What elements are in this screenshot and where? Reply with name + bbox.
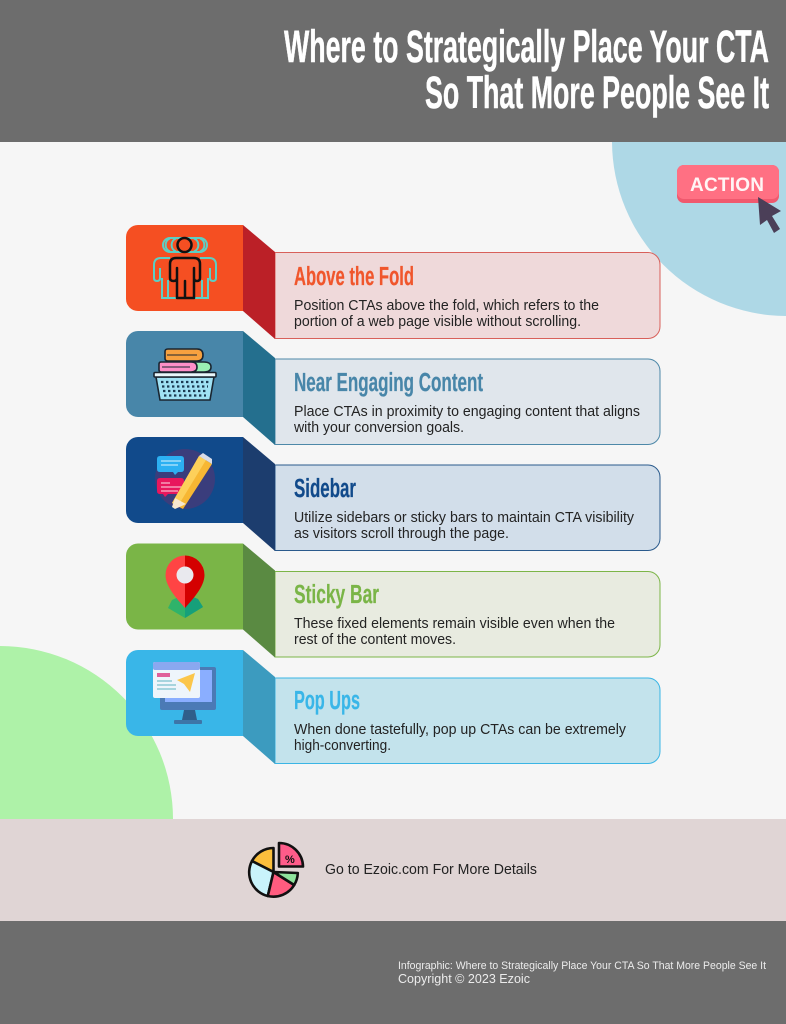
description: Utilize sidebars or sticky bars to maintain CTA visibility — [294, 510, 635, 526]
heading: Sticky Bar — [294, 581, 379, 609]
icon: group of people — [154, 238, 216, 298]
title — [284, 21, 769, 118]
call to action text: Go to Ezoic.com For More Details — [325, 862, 537, 878]
heading: Pop Ups — [294, 687, 360, 715]
header band — [0, 0, 786, 142]
credit text: Infographic: Where to Strategically Place Your CTA So That More People See It — [398, 960, 766, 972]
card background — [275, 465, 660, 550]
description: These fixed elements remain visible even when the — [294, 616, 615, 632]
description — [294, 616, 615, 648]
panel: sticky bar — [126, 544, 660, 658]
description — [294, 722, 627, 754]
fold — [243, 437, 275, 551]
icon tab — [126, 331, 243, 417]
description — [293, 404, 640, 436]
card background — [275, 252, 660, 338]
main panel background — [0, 142, 786, 820]
icon tab — [126, 650, 243, 736]
icon: pie chart: % — [285, 854, 295, 866]
decorative blue quarter circle — [612, 142, 786, 316]
heading: Near Engaging Content — [294, 369, 483, 397]
heading: Above the Fold — [294, 263, 414, 291]
fold — [243, 544, 275, 658]
decorative green quarter circle — [0, 646, 173, 819]
description: Position CTAs above the fold, which refers to the — [294, 298, 599, 314]
description: with your conversion goals. — [293, 420, 464, 436]
icon tab — [126, 544, 243, 630]
card background — [275, 572, 660, 657]
icon tab — [126, 437, 243, 523]
icon tab — [126, 225, 243, 311]
card background — [275, 678, 660, 764]
description: When done tastefully, pop up CTAs can be extremely — [294, 722, 627, 738]
icon: pie chart — [249, 843, 303, 897]
panel: above the fold — [126, 225, 660, 339]
credit text: Copyright © 2023 Ezoic — [398, 972, 530, 986]
description: Place CTAs in proximity to engaging content that aligns — [294, 404, 640, 420]
credit text — [398, 960, 766, 986]
description: as visitors scroll through the page. — [294, 526, 509, 542]
description: high-converting. — [294, 738, 391, 754]
icon: chat bubbles and pencil — [155, 449, 215, 509]
panel: sidebar — [126, 437, 660, 551]
panel: pop ups — [126, 650, 660, 764]
fold — [243, 650, 275, 764]
panel: near engaging content — [126, 331, 660, 445]
bottom band — [0, 921, 786, 1024]
icon: laundry basket — [154, 349, 216, 400]
description — [294, 510, 635, 542]
icon: action button with cursor: ACTION — [690, 175, 764, 196]
footer band — [0, 819, 786, 921]
icon: monitor with pop-up window — [153, 662, 216, 724]
icon: map pin — [166, 556, 204, 618]
icon: action button with cursor — [677, 165, 781, 233]
card background — [275, 359, 660, 444]
description: rest of the content moves. — [294, 632, 456, 648]
fold — [243, 225, 275, 339]
description — [294, 298, 599, 330]
fold — [243, 331, 275, 445]
description: portion of a web page visible without scrolling. — [294, 314, 581, 330]
heading: Sidebar — [294, 475, 356, 503]
